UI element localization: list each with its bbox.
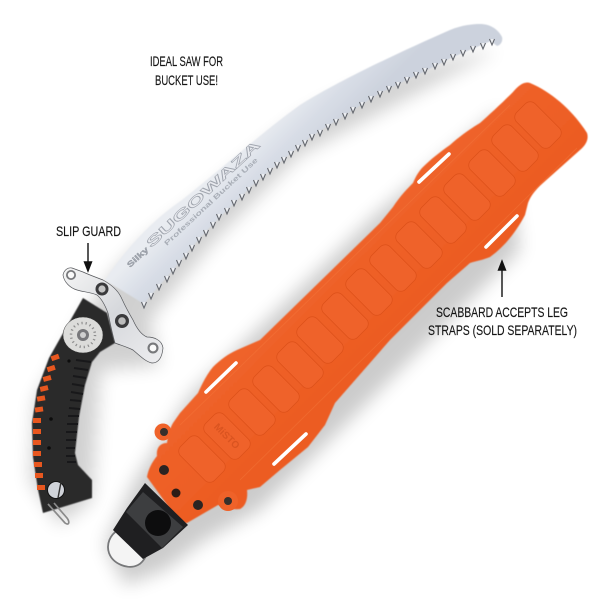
label: ideal saw: BUCKET USE! [155, 72, 218, 88]
scabbard [105, 83, 588, 585]
label: slip guard: SLIP GUARD [56, 223, 121, 239]
scabbard ridge lines [180, 105, 577, 480]
lanyard ring [48, 503, 69, 524]
tip gloss box [126, 492, 183, 548]
scabbard tip [108, 483, 188, 567]
label: ideal saw [150, 53, 223, 88]
handle grip ridges [66, 360, 91, 462]
scabbard rivets [154, 424, 238, 511]
saw shadow [30, 50, 498, 525]
blade teeth [142, 39, 494, 308]
scabbard shadow [105, 110, 520, 585]
blade brand lettering: SUGOWAZA [143, 136, 264, 250]
handle [32, 298, 115, 524]
saw [30, 24, 502, 525]
tip button [145, 510, 171, 536]
black tip [113, 483, 188, 559]
guard rivets [66, 270, 158, 354]
D-ring [108, 530, 146, 567]
handle orange inserts [33, 354, 60, 490]
handle small dots [47, 359, 71, 450]
lanyard screw [48, 482, 64, 498]
strap slots [206, 154, 517, 464]
arrow: scabbard straps [498, 261, 506, 297]
label: scabbard straps [428, 304, 577, 338]
arrow: slip guard [84, 243, 92, 271]
pivot knob [63, 317, 103, 353]
scabbard body [147, 83, 588, 523]
blade brand lettering: Professional Bucket Use [163, 157, 260, 247]
scabbard pockets [176, 99, 564, 485]
slip guard plate [63, 268, 163, 363]
label: ideal saw: IDEAL SAW FOR [150, 53, 223, 69]
blade brand lettering: Silky [125, 245, 151, 269]
scabbard logo: MiSTO [211, 422, 241, 452]
blade [105, 24, 502, 304]
handle body [32, 298, 115, 513]
blade brand lettering [122, 136, 269, 276]
